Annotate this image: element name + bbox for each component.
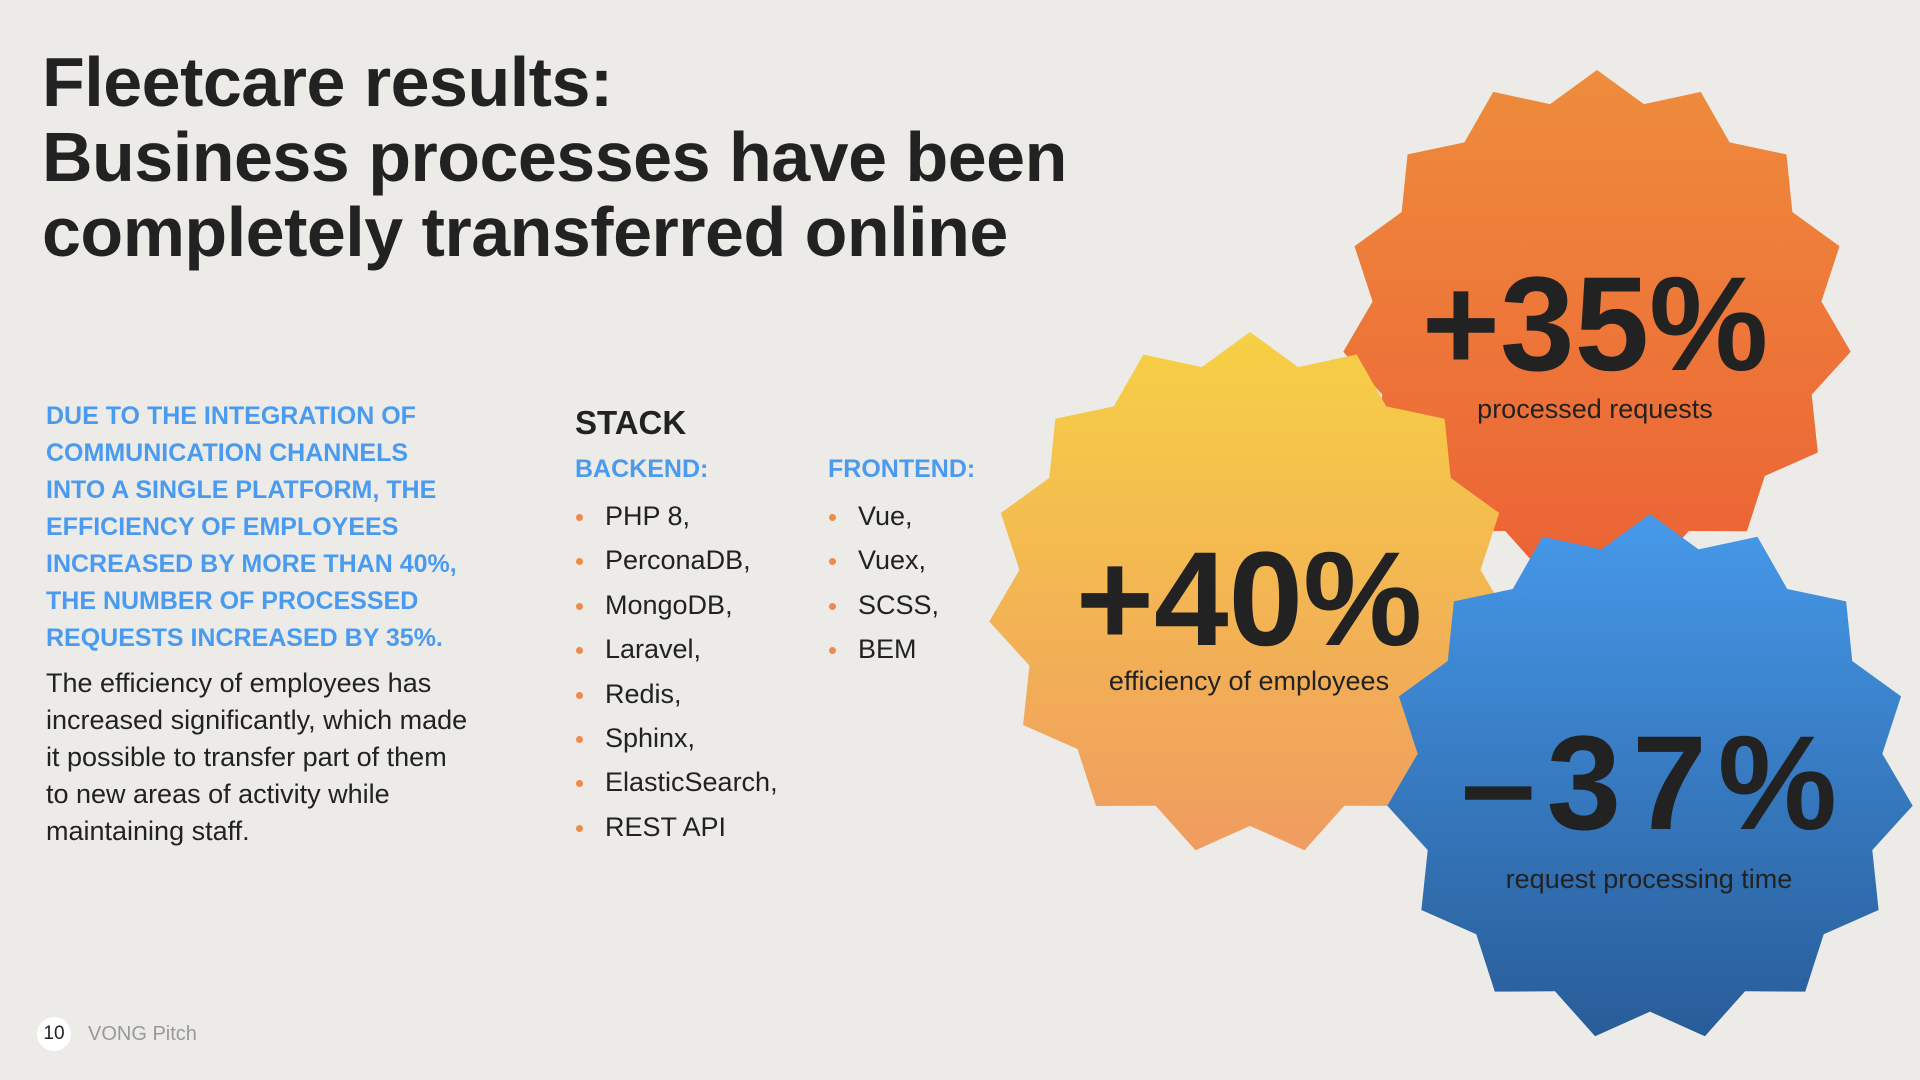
title: completely transferred online — [42, 193, 1008, 271]
backend list: REST API — [605, 812, 726, 842]
frontend list: Vuex, — [858, 545, 926, 575]
backend list: ElasticSearch, — [605, 767, 778, 797]
star: +35% processed requests: +35% — [1422, 250, 1768, 399]
highlight text: REQUESTS INCREASED BY 35%. — [46, 624, 443, 652]
highlight text: INTO A SINGLE PLATFORM, THE — [46, 476, 436, 504]
frontend list: Vue, — [858, 501, 913, 531]
highlight text — [46, 402, 457, 652]
body text: to new areas of activity while — [46, 779, 390, 809]
backend list: Sphinx, — [605, 723, 695, 753]
star: +35% processed requests — [1343, 70, 1851, 574]
backend list: BACKEND: — [575, 455, 708, 483]
stack heading: STACK — [575, 404, 686, 441]
frontend list — [828, 455, 975, 664]
body text: increased significantly, which made — [46, 705, 467, 735]
backend list: Laravel, — [605, 634, 701, 664]
frontend list: BEM — [858, 634, 917, 664]
title: Fleetcare results: — [42, 43, 613, 121]
frontend list: FRONTEND: — [828, 455, 975, 483]
highlight text: COMMUNICATION CHANNELS — [46, 439, 408, 467]
star: -37% processing time — [1387, 514, 1913, 1036]
star: +40% efficiency: efficiency of employees — [1109, 666, 1389, 696]
star: +40% efficiency: +40% — [1076, 525, 1422, 674]
highlight text: INCREASED BY MORE THAN 40%, — [46, 550, 457, 578]
star: -37% processing time: –37% — [1461, 709, 1837, 858]
highlight text: THE NUMBER OF PROCESSED — [46, 587, 418, 615]
footer: page number: 10 — [43, 1023, 65, 1044]
star: +35% processed requests: processed requests — [1477, 394, 1713, 424]
star: -37% processing time: request processing time — [1506, 864, 1792, 894]
backend list: PHP 8, — [605, 501, 690, 531]
title: Business processes have been — [42, 118, 1067, 196]
footer: brand: VONG Pitch — [88, 1023, 197, 1045]
frontend list: SCSS, — [858, 590, 939, 620]
footer: page number — [37, 1017, 71, 1051]
backend list — [575, 455, 778, 842]
backend list: PerconaDB, — [605, 545, 751, 575]
star: +40% efficiency — [989, 332, 1511, 850]
highlight text: DUE TO THE INTEGRATION OF — [46, 402, 416, 430]
title — [42, 43, 1067, 271]
body text — [46, 668, 467, 846]
highlight text: EFFICIENCY OF EMPLOYEES — [46, 513, 398, 541]
body text: it possible to transfer part of them — [46, 742, 447, 772]
body text: maintaining staff. — [46, 816, 250, 846]
backend list: Redis, — [605, 679, 682, 709]
body text: The efficiency of employees has — [46, 668, 431, 698]
backend list: MongoDB, — [605, 590, 733, 620]
